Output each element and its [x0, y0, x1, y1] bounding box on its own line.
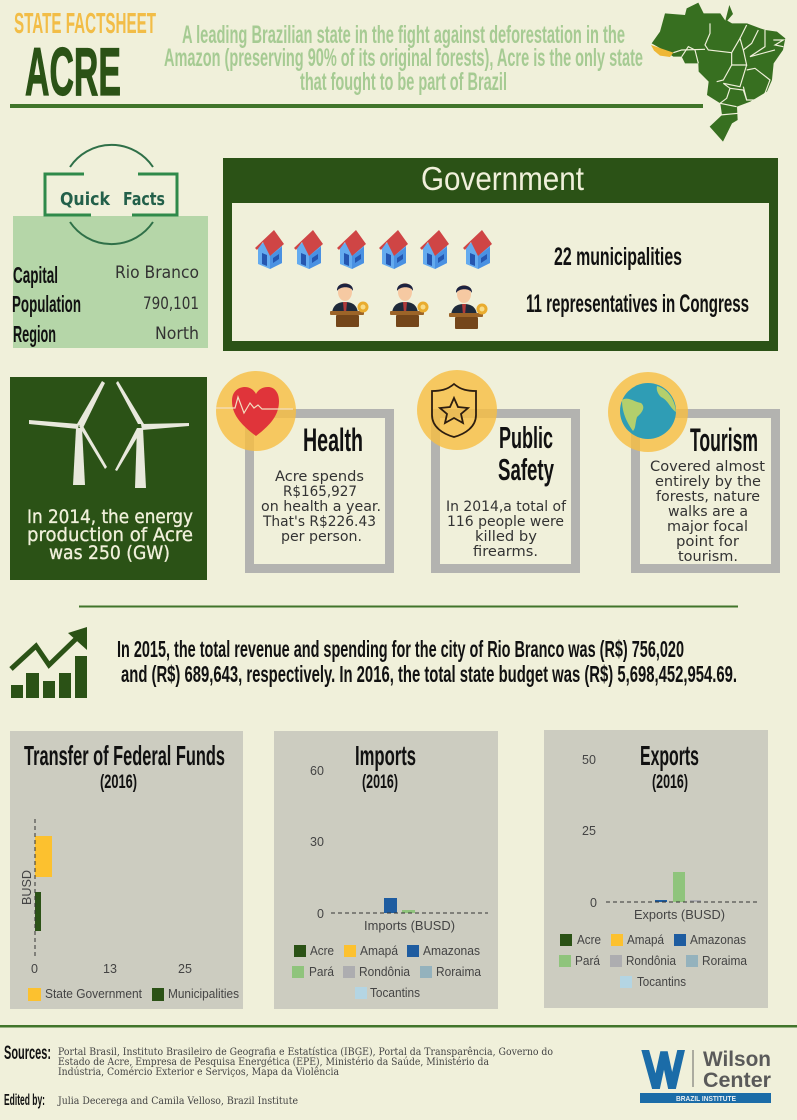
heading: public safety	[498, 420, 554, 487]
axis labels: BUSD	[20, 870, 34, 905]
tourism text: major focal	[667, 519, 748, 535]
quick facts badge: Quick	[60, 189, 111, 210]
axis labels: 0	[317, 907, 324, 921]
axis labels: 25	[582, 824, 596, 838]
icons: municipalities houses	[255, 230, 492, 269]
facts background	[13, 216, 208, 348]
chart heading: (2016)	[362, 772, 398, 793]
chart heading: Imports	[355, 740, 416, 771]
bars	[35, 819, 52, 957]
legend	[28, 987, 239, 1001]
panel: public safety	[417, 370, 576, 568]
public safety text: In 2014,a total of	[446, 499, 567, 515]
intro text: that fought to be part of Brazil	[300, 68, 507, 96]
icon: shield	[417, 370, 497, 450]
footer: editors	[4, 1092, 298, 1109]
footer: sources: Sources:	[4, 1043, 51, 1064]
health text: That's R$226.43	[262, 514, 376, 530]
legend: Amazonas	[690, 933, 746, 947]
legend: Tocantins	[370, 986, 420, 1000]
intro text	[164, 21, 643, 96]
public safety text: killed by	[475, 529, 537, 545]
tourism text: point for	[676, 534, 739, 550]
health text: Acre spends	[275, 469, 364, 485]
footer: sources: Indústria, Comércio Exterior e Serviços, Mapa da Violência	[58, 1067, 339, 1078]
legend: Pará	[575, 954, 600, 968]
chart heading	[640, 740, 699, 793]
axis labels: 60	[310, 764, 324, 778]
legend: Amapá	[360, 944, 398, 958]
health text: R$165,927	[283, 484, 357, 500]
legend: Acre	[310, 944, 334, 958]
footer: editors: Julia Decerega and Camila Velloso, Brazil Institute	[57, 1096, 298, 1107]
public safety text	[446, 499, 567, 560]
bars	[606, 872, 757, 902]
logo: Wilson Center Brazil Institute: BRAZIL INSTITUTE	[676, 1096, 736, 1103]
heading: public safety: Public	[499, 420, 553, 455]
legend	[559, 933, 747, 989]
tourism text: walks are a	[668, 504, 748, 520]
legend: Amazonas	[423, 944, 480, 958]
axis labels: 0	[590, 896, 597, 910]
icons: representatives	[330, 283, 488, 329]
chart heading	[24, 740, 225, 793]
footer: sources	[4, 1043, 553, 1078]
chart heading: (2016)	[100, 772, 137, 793]
tourism text: entirely by the	[655, 474, 761, 490]
panel: exports chart	[544, 730, 768, 1008]
chart heading: Transfer of Federal Funds	[24, 740, 225, 771]
footer: editors: Edited by:	[4, 1092, 45, 1109]
icon: globe	[608, 372, 688, 452]
footer: sources: Portal Brasil, Instituto Brasileiro de Geografia e Estatística (IBGE), Portal da Transparência, Governo do	[58, 1047, 553, 1058]
icon: growth chart	[11, 627, 87, 698]
legend: Pará	[309, 965, 334, 979]
health text: per person.	[281, 529, 362, 545]
quick facts badge	[45, 145, 177, 244]
axis labels: Exports (BUSD)	[634, 908, 725, 922]
kicker: state factsheet: STATE FACTSHEET	[14, 8, 156, 40]
energy text: In 2014, the energy	[27, 506, 193, 528]
icon: map of Brazil with Acre highlighted	[651, 3, 785, 142]
public safety text: 116 people were	[447, 514, 564, 530]
legend: Municipalities	[168, 987, 239, 1001]
budget section	[11, 627, 737, 698]
legend: Tocantins	[637, 975, 686, 989]
logo: Wilson Center Brazil Institute	[640, 1050, 771, 1103]
fact: capital	[13, 262, 199, 288]
icon: heart	[216, 371, 296, 451]
axis labels: Imports (BUSD)	[364, 919, 455, 933]
fact: population: 790,101	[143, 294, 199, 314]
fact: population	[12, 291, 199, 317]
fact: population: Population	[12, 291, 81, 317]
chart heading: Exports	[640, 740, 699, 771]
public safety text: firearms.	[473, 544, 538, 560]
energy text: production of Acre	[27, 524, 193, 546]
heading: government: Government	[421, 160, 584, 197]
tourism text	[650, 459, 765, 565]
logo: Wilson Center Brazil Institute: Center	[703, 1069, 771, 1092]
legend: Rondônia	[359, 965, 410, 979]
fact: capital: Capital	[13, 262, 58, 288]
legend: Roraima	[702, 954, 747, 968]
quick facts badge: Facts	[123, 189, 165, 210]
panel: imports chart	[274, 731, 498, 1009]
icon: wind turbines	[29, 381, 189, 488]
legend: Acre	[577, 933, 601, 947]
energy text: was 250 (GW)	[49, 542, 170, 564]
budget text	[117, 636, 737, 687]
health text	[261, 469, 381, 545]
heading: public safety: Safety	[498, 452, 554, 487]
axis labels: 25	[178, 962, 192, 976]
panel: health	[216, 371, 390, 568]
axis labels: 13	[103, 962, 117, 976]
bars	[331, 898, 488, 913]
panel: transfer of federal funds chart	[10, 731, 243, 1009]
tourism text: Covered almost	[650, 459, 765, 475]
legend: Amapá	[627, 933, 664, 947]
tourism text: tourism.	[678, 549, 738, 565]
chart heading: (2016)	[652, 772, 688, 793]
axis labels: 0	[31, 962, 38, 976]
legend	[292, 944, 481, 1000]
axis labels: 50	[582, 753, 596, 767]
stat: municipalities: 22 municipalities	[554, 243, 682, 271]
legend: State Government	[45, 987, 142, 1001]
fact: region	[13, 321, 199, 347]
axis labels	[310, 764, 455, 933]
panel: tourism	[608, 372, 776, 568]
header: ACRE	[25, 34, 121, 110]
fact: region: North	[155, 324, 199, 344]
fact: capital: Rio Branco	[115, 263, 199, 283]
legend: Roraima	[436, 965, 481, 979]
chart heading	[355, 740, 416, 793]
axis labels	[20, 870, 192, 976]
panel: quick facts	[12, 145, 208, 348]
energy text	[27, 506, 193, 564]
legend: Rondônia	[626, 954, 676, 968]
axis labels	[582, 753, 725, 922]
panel: energy	[10, 377, 207, 580]
header	[10, 8, 703, 110]
axis labels: 30	[310, 835, 324, 849]
panel: government	[223, 158, 778, 351]
fact: region: Region	[13, 321, 56, 347]
tourism text: forests, nature	[656, 489, 760, 505]
logo: Wilson Center Brazil Institute: Wilson	[703, 1048, 771, 1071]
footer: sources: Estado de Acre, Empresa de Pesquisa Energética (EPE), Ministério da Saúde, Ministério da	[58, 1057, 489, 1068]
health text: on health a year.	[261, 499, 381, 515]
heading: health: Health	[303, 422, 363, 458]
